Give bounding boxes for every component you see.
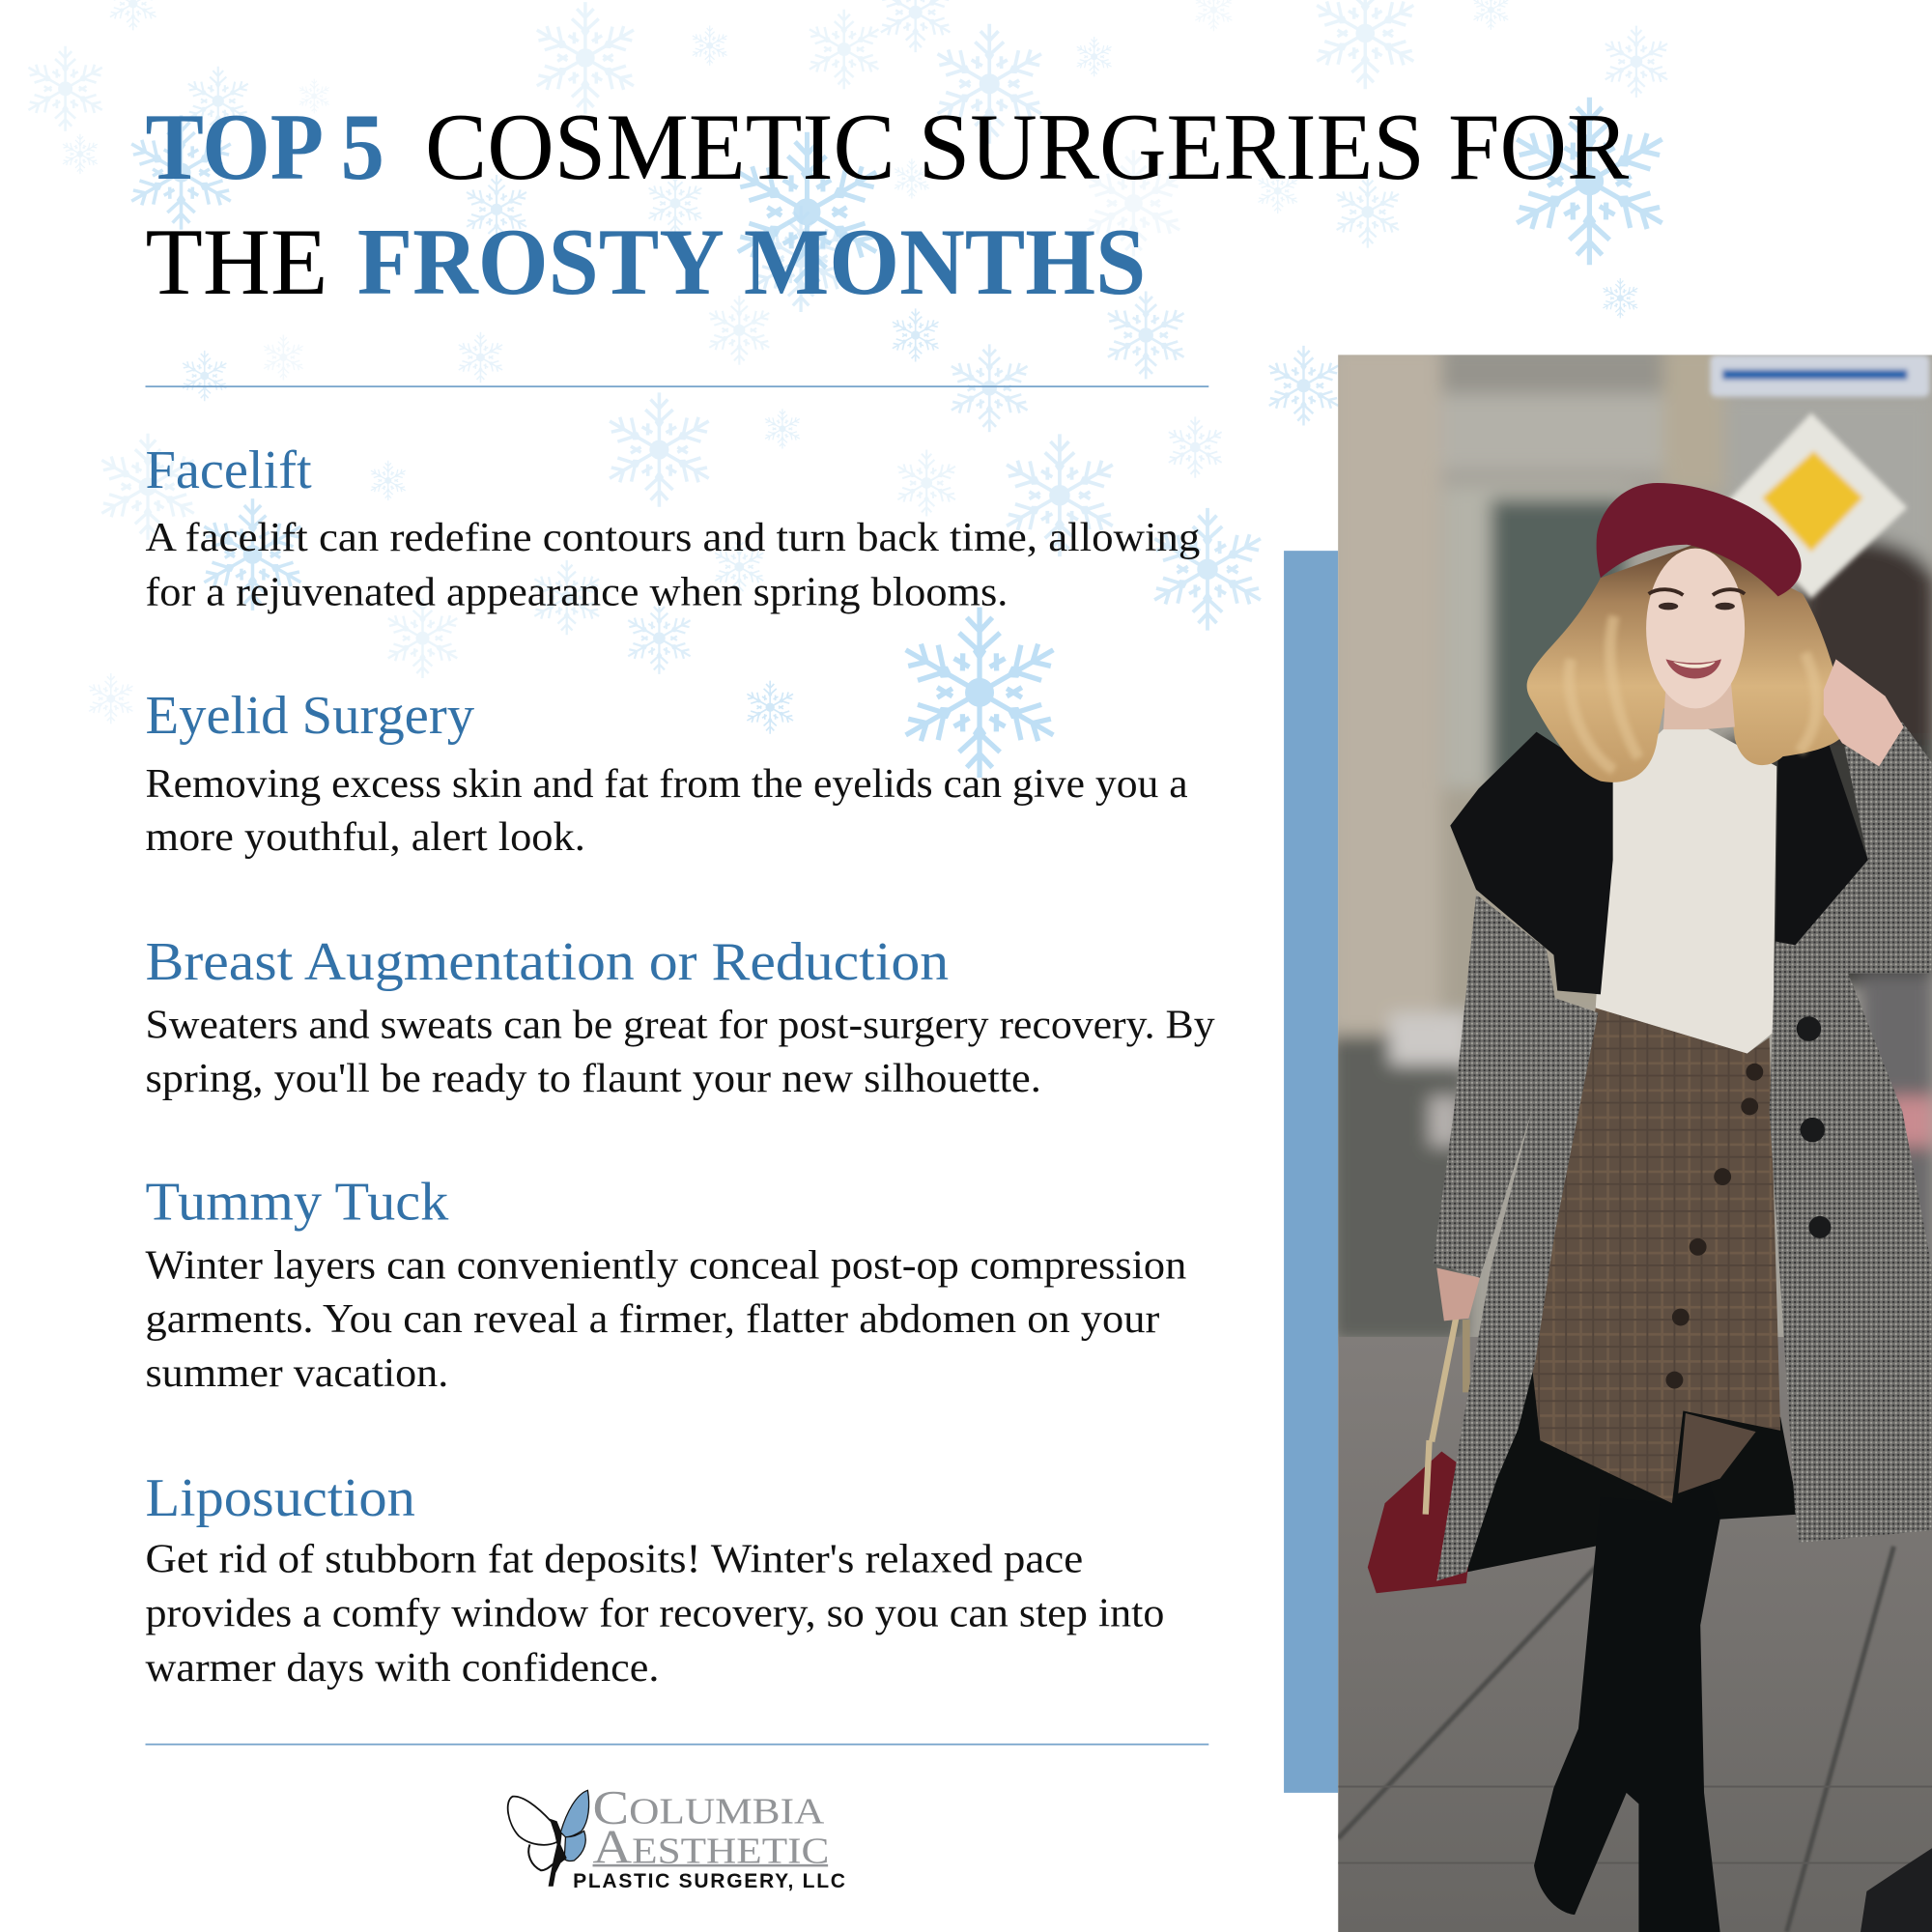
- beret: [1597, 483, 1802, 596]
- logo wordmark: COLUMBIA: [593, 1781, 825, 1834]
- section: Facelift: A facelift can redefine contours and turn back time, allowing: [146, 515, 1200, 560]
- section: Breast Augmentation or Reduction: [146, 932, 1215, 1101]
- section: Liposuction: provides a comfy window for recovery, so you can step into: [146, 1591, 1164, 1636]
- coat buttons: [1797, 1016, 1831, 1238]
- fur collar: [1450, 732, 1868, 994]
- title: THE: [146, 210, 327, 315]
- section: Liposuction: Get rid of stubborn fat deposits! Winter's relaxed pace: [146, 1537, 1083, 1582]
- road sign top: [1710, 355, 1929, 397]
- section: Liposuction: Liposuction: [146, 1468, 415, 1528]
- section: Breast Augmentation or Reduction: Sweaters and sweats can be great for post-surgery recovery. By: [146, 1003, 1215, 1048]
- section: Facelift: for a rejuvenated appearance when spring blooms.: [146, 569, 1008, 614]
- section: Tummy Tuck: Tummy Tuck: [146, 1173, 449, 1233]
- section: Breast Augmentation or Reduction: spring, you'll be ready to flaunt your new silhouette.: [146, 1056, 1041, 1101]
- section: Tummy Tuck: [146, 1173, 1186, 1396]
- icon: butterfly fairy: [508, 1790, 589, 1887]
- logo wordmark: AESTHETIC: [593, 1821, 829, 1874]
- logo wordmark: [593, 1781, 829, 1874]
- title: FROSTY MONTHS: [357, 210, 1146, 315]
- section: Eyelid Surgery: Eyelid Surgery: [146, 686, 474, 746]
- road sign diamond: [1726, 412, 1907, 599]
- face: [1646, 549, 1745, 708]
- photo: smiling woman in winter coat and beret on a city street: [1331, 345, 1932, 1932]
- raised hand: [1824, 659, 1904, 766]
- neck: [1663, 684, 1735, 729]
- hair: [1527, 542, 1847, 782]
- title: COSMETIC SURGERIES FOR: [425, 95, 1630, 200]
- sweater: [1596, 727, 1776, 1054]
- coat: [1433, 722, 1932, 1580]
- background snowflakes: [22, 0, 1675, 778]
- section: Eyelid Surgery: more youthful, alert look.: [146, 814, 585, 860]
- blurred street background: [1331, 345, 1932, 1343]
- skirt buttons: [1665, 1064, 1763, 1389]
- section: Eyelid Surgery: [146, 686, 1188, 860]
- section: Breast Augmentation or Reduction: Breast Augmentation or Reduction: [146, 932, 949, 992]
- section: Eyelid Surgery: Removing excess skin and fat from the eyelids can give you a: [146, 761, 1188, 807]
- section: Liposuction: [146, 1468, 1164, 1690]
- section: Tummy Tuck: garments. You can reveal a firmer, flatter abdomen on your: [146, 1296, 1159, 1342]
- logo: Columbia Aesthetic Plastic Surgery: [508, 1781, 845, 1892]
- skirt: [1531, 1008, 1780, 1503]
- logo tagline: PLASTIC SURGERY, LLC: [573, 1870, 845, 1892]
- section: Facelift: [146, 440, 1200, 614]
- lower hand: [1436, 1267, 1480, 1321]
- boots: [1534, 1480, 1720, 1932]
- section: Facelift: Facelift: [146, 440, 312, 500]
- coat lining: [1466, 1368, 1799, 1573]
- title: TOP 5: [146, 95, 384, 200]
- handbag: [1368, 1320, 1470, 1594]
- section: Tummy Tuck: summer vacation.: [146, 1350, 448, 1396]
- pavement: [1338, 1337, 1932, 1932]
- section: Liposuction: warmer days with confidence.: [146, 1645, 659, 1690]
- title: [146, 95, 1630, 315]
- skin above boot: [1678, 1413, 1756, 1493]
- section: Tummy Tuck: Winter layers can conveniently conceal post-op compression: [146, 1242, 1186, 1288]
- blue accent panel: [1284, 551, 1338, 1793]
